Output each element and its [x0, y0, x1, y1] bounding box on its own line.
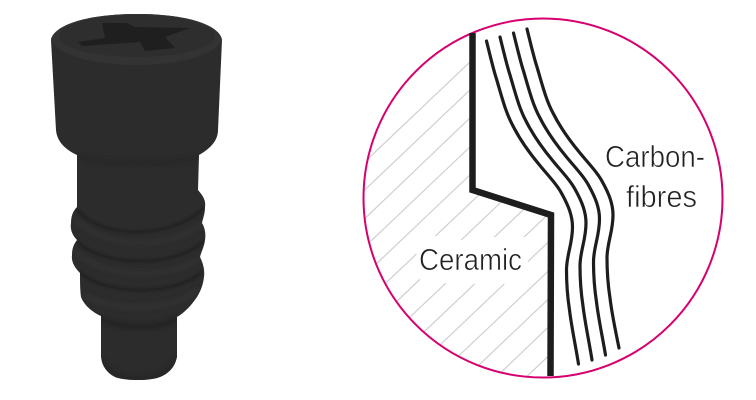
thread and neck shading — [76, 156, 204, 379]
cross recess — [78, 23, 190, 51]
screw silhouette — [51, 14, 222, 380]
label: Carbon-fibres — [605, 139, 705, 214]
screw illustration — [51, 14, 222, 380]
screw head top face — [51, 14, 222, 65]
magnified detail circle — [362, 18, 724, 378]
ceramic label mask — [414, 236, 528, 284]
magenta circle outline — [364, 18, 722, 378]
carbon fibres — [486, 29, 619, 364]
screw head inner face — [59, 15, 215, 57]
label: Carbon-fibres: fibres — [626, 179, 697, 214]
label: Ceramic: Ceramic — [419, 242, 522, 277]
ceramic boundary line — [472, 33, 551, 376]
ceramic hatching — [364, 62, 548, 376]
label: Carbon-fibres: Carbon- — [605, 139, 705, 174]
